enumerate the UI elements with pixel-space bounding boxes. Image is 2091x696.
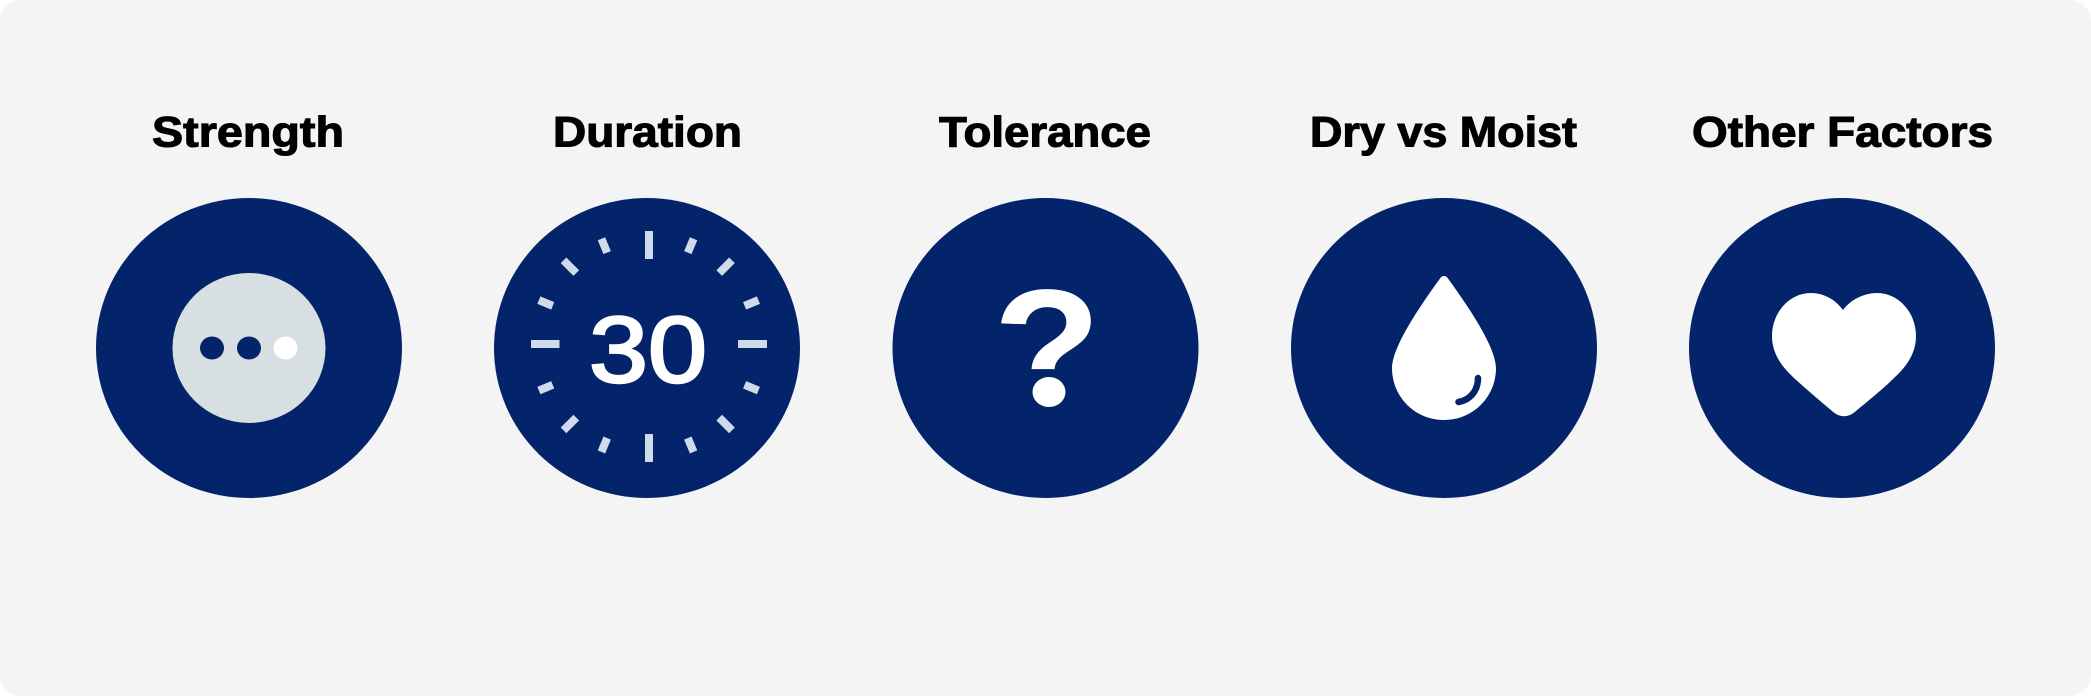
icon: timer dial showing 30	[494, 198, 800, 498]
panel: tolerance	[892, 108, 1198, 498]
heading: other factors: Other Factors	[1692, 108, 1993, 156]
panel: other factors	[1689, 108, 1995, 498]
icon: timer dial showing 30: 30	[589, 297, 707, 402]
panel: strength	[96, 108, 402, 498]
icon: water drop	[1291, 198, 1597, 498]
heading: duration: Duration	[553, 108, 742, 156]
heading: strength: Strength	[152, 108, 344, 156]
panel: duration	[494, 108, 800, 498]
icon: heart	[1689, 198, 1995, 498]
heading: tolerance: Tolerance	[939, 108, 1151, 156]
icon: strength dots dial	[96, 198, 402, 498]
heading: dry vs moist: Dry vs Moist	[1310, 108, 1577, 156]
panel: dry vs moist	[1291, 108, 1597, 498]
icon: question mark: ?	[993, 255, 1101, 438]
icon: question mark	[892, 198, 1198, 498]
